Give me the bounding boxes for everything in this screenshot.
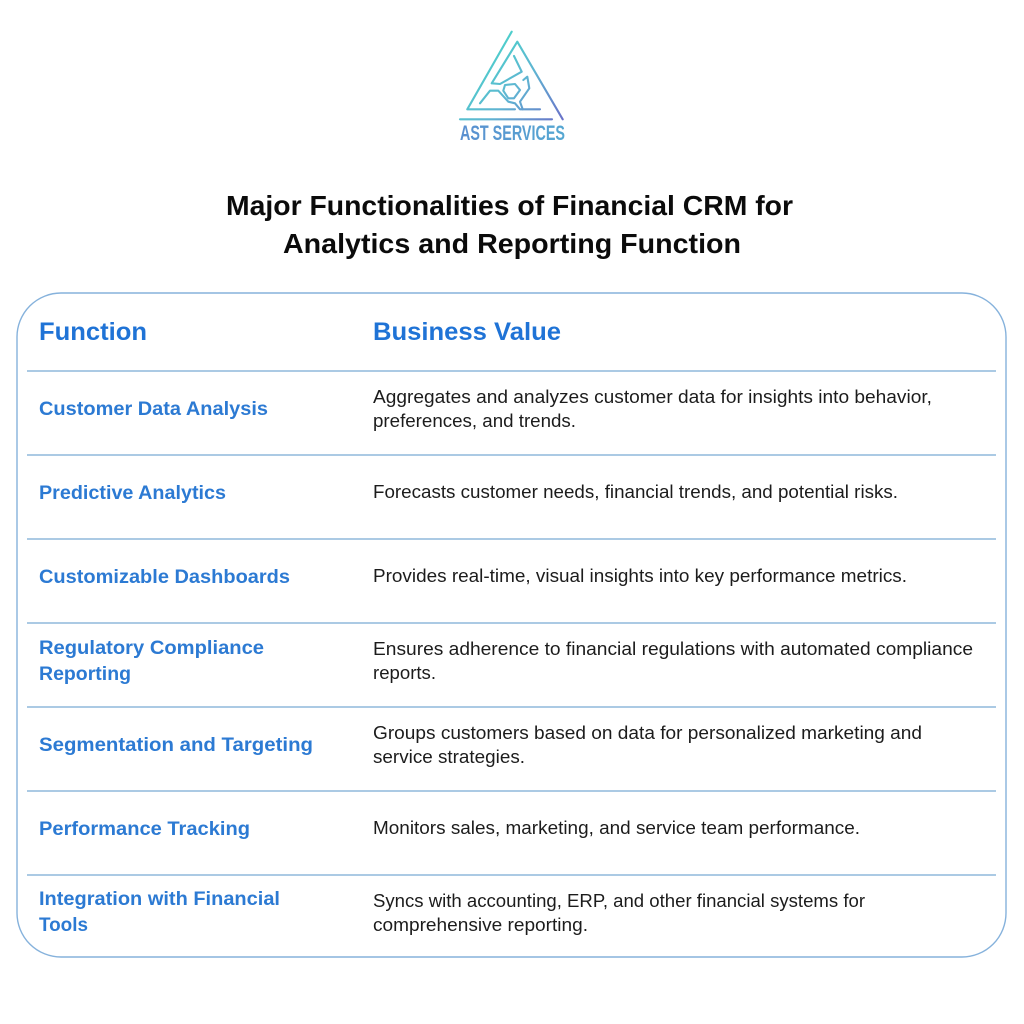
- row: Customizable Dashboards: Provides real-time, visual insights into key performance metrics.: [373, 566, 907, 586]
- row: Performance Tracking: [39, 818, 860, 840]
- row: Predictive Analytics: Forecasts customer needs, financial trends, and potential risks.: [373, 482, 898, 502]
- table border: [17, 293, 1006, 957]
- row: Integration with Financial Tools: Syncs with accounting, ERP, and other financial systems for: [373, 891, 865, 911]
- row: Customer Data Analysis: Aggregates and analyzes customer data for insights into behavior,: [373, 387, 932, 407]
- logo: AST Services: [460, 32, 565, 145]
- title: Analytics and Reporting Function: [283, 228, 741, 259]
- row: Performance Tracking: Monitors sales, marketing, and service team performance.: [373, 818, 860, 838]
- icon: triangle circuit mark: [460, 32, 563, 119]
- column heading: Function: Function: [39, 318, 147, 346]
- row: Regulatory Compliance Reporting: Reporting: [39, 663, 131, 685]
- row: Customer Data Analysis: [39, 387, 932, 431]
- row: Predictive Analytics: [39, 482, 898, 504]
- title: [226, 190, 793, 259]
- row: Integration with Financial Tools: comprehensive reporting.: [373, 915, 588, 935]
- row: Regulatory Compliance Reporting: Regulatory Compliance: [39, 637, 264, 659]
- row: Customer Data Analysis: preferences, and trends.: [373, 411, 576, 431]
- row: Segmentation and Targeting: Segmentation and Targeting: [39, 734, 313, 756]
- row: Predictive Analytics: Predictive Analytics: [39, 482, 226, 504]
- row: Integration with Financial Tools: Integration with Financial: [39, 888, 280, 910]
- row: Regulatory Compliance Reporting: [39, 637, 973, 685]
- column heading: Business Value: Business Value: [373, 318, 561, 346]
- row: Performance Tracking: Performance Tracking: [39, 818, 250, 840]
- row: Customizable Dashboards: [39, 566, 907, 588]
- row: Customer Data Analysis: Customer Data Analysis: [39, 398, 268, 420]
- panel: function table: [17, 293, 1006, 957]
- row: Segmentation and Targeting: Groups customers based on data for personalized marketing and: [373, 723, 922, 743]
- row: Regulatory Compliance Reporting: reports.: [373, 663, 436, 683]
- row: Customizable Dashboards: Customizable Dashboards: [39, 566, 290, 588]
- row: Segmentation and Targeting: service strategies.: [373, 747, 525, 767]
- logo wordmark: AST SERVICES: [460, 122, 565, 145]
- row: Integration with Financial Tools: Tools: [39, 914, 88, 936]
- title: Major Functionalities of Financial CRM for: [226, 190, 793, 221]
- row: Segmentation and Targeting: [39, 723, 922, 767]
- row: Integration with Financial Tools: [39, 888, 865, 936]
- row: Regulatory Compliance Reporting: Ensures adherence to financial regulations with automated compliance: [373, 639, 973, 659]
